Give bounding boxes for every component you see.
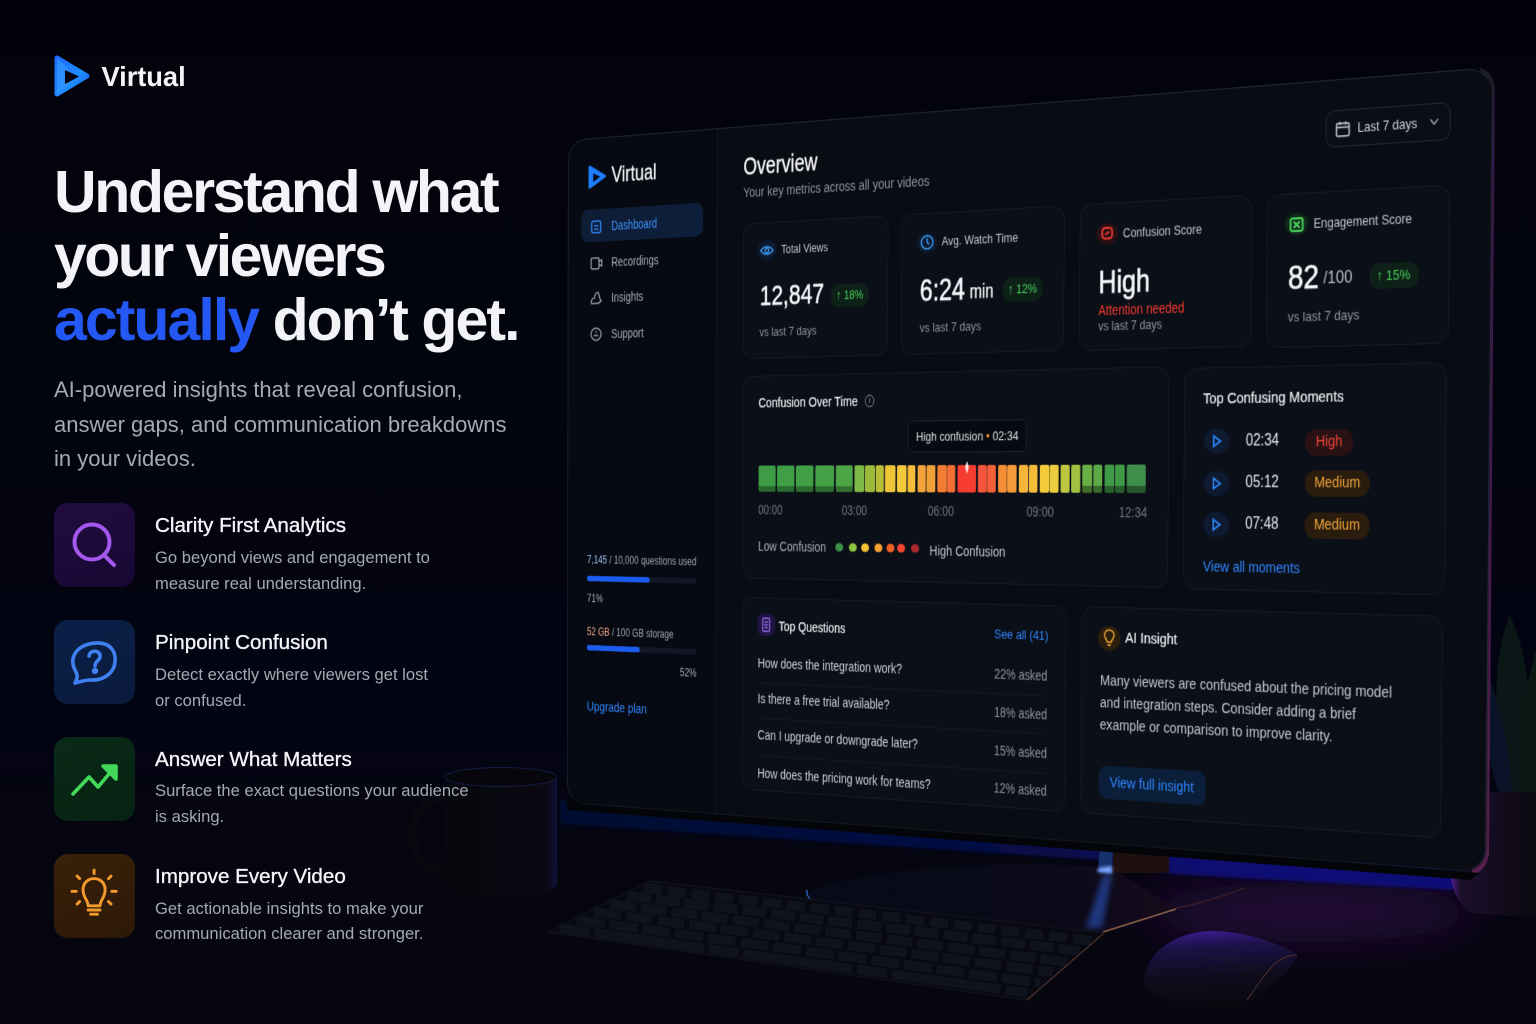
view insight button (1098, 765, 1205, 805)
description (155, 665, 428, 710)
insight text: and integration steps. Consider adding a brief (1100, 694, 1356, 724)
headline: your viewers (54, 223, 384, 289)
feature: Clarity First Analytics (54, 503, 430, 592)
icon: clock (917, 232, 937, 253)
play button (1203, 470, 1229, 496)
icon: support (590, 326, 602, 342)
icon: info (864, 394, 875, 408)
question text: How does the integration work? (758, 656, 902, 677)
storage label: 52 GB / 100 GB storage (587, 625, 674, 641)
panel: confusion score (1079, 195, 1253, 351)
brand logo (54, 56, 186, 96)
delta badge (1369, 262, 1418, 289)
description (155, 781, 469, 826)
time: 07:48 (1245, 515, 1279, 533)
unit: min (970, 280, 994, 303)
moment row 1 (1204, 428, 1354, 456)
storage bar (587, 645, 697, 655)
severity (1305, 470, 1370, 497)
icon: chevron (1430, 118, 1439, 125)
usage bar (587, 576, 697, 584)
monitor back edge (567, 68, 1495, 880)
desk glow (560, 800, 1480, 942)
delta badge (831, 283, 869, 307)
comparison: vs last 7 days (1098, 316, 1162, 334)
heading: Overview: Overview (743, 149, 818, 181)
panel: average watch time (901, 205, 1065, 355)
description: Go beyond views and engagement to (155, 548, 430, 567)
severity: High (1316, 433, 1342, 450)
headline: actually don’t get. (54, 287, 519, 353)
panel title: Top Confusing Moments (1203, 387, 1344, 407)
axis tick 06:00: 06:00 (928, 503, 954, 519)
panel: total views (743, 215, 888, 359)
question text: Is there a free trial available? (758, 692, 890, 713)
icon: engagement (1285, 213, 1309, 236)
view all link: View all moments (1203, 559, 1300, 577)
icon: recordings (590, 257, 603, 270)
alert: Attention needed (1098, 299, 1185, 318)
comparison: vs last 7 days (920, 318, 981, 335)
label: Dashboard (611, 217, 657, 234)
question 2 (758, 692, 1047, 722)
description: Detect exactly where viewers get lost (155, 665, 428, 684)
value: 6:24 (920, 272, 965, 308)
plant (1450, 615, 1536, 918)
delta badge (1003, 276, 1042, 301)
time: 02:34 (1246, 432, 1279, 450)
title: Answer What Matters (155, 748, 352, 771)
storage usage (586, 625, 697, 680)
icon: insights (590, 291, 602, 305)
comparison: vs last 7 days (759, 323, 817, 339)
value: 82 (1288, 257, 1319, 296)
description (155, 548, 430, 592)
severity (1305, 428, 1353, 455)
label: Avg. Watch Time (942, 230, 1018, 248)
severity (1304, 512, 1370, 539)
legend low label: Low Confusion (758, 539, 826, 556)
subheading: answer gaps, and communication breakdowns (54, 412, 506, 437)
subheading: AI-powered insights that reveal confusion, (54, 377, 462, 402)
icon: light bulb (54, 854, 135, 938)
mug (412, 768, 557, 900)
label: Engagement Score (1314, 210, 1412, 231)
label: Recordings (611, 253, 659, 270)
play button (1203, 511, 1229, 537)
axis tick 03:00: 03:00 (842, 503, 867, 518)
tooltip (908, 419, 1027, 453)
label: Total Views (781, 240, 828, 256)
dashboard main area (742, 102, 1451, 838)
severity: Medium (1314, 516, 1360, 534)
label: Confusion Score (1123, 221, 1202, 241)
nav: Dashboard active (581, 203, 703, 243)
feature: Answer What Matters (54, 737, 469, 826)
panel: sidebar (568, 129, 718, 812)
panel: AI insight (1080, 606, 1443, 838)
panel: confusion over time (742, 366, 1169, 588)
see all link: See all (41) (994, 626, 1048, 643)
panel: engagement score (1266, 184, 1450, 348)
icon: dashboard (590, 220, 602, 234)
value: High (1098, 262, 1150, 300)
insight text: example or comparison to improve clarity. (1100, 716, 1333, 746)
question 1 (758, 656, 1047, 684)
scale: /100 (1323, 266, 1352, 288)
chart title: Confusion Over Time (758, 394, 858, 411)
feature: Improve Every Video (54, 854, 424, 943)
title: Pinpoint Confusion (155, 631, 328, 654)
comparison: vs last 7 days (1288, 306, 1359, 324)
usage label: 7,145 / 10,000 questions used (587, 553, 697, 568)
delta badge: ↑ 12% (1008, 280, 1037, 296)
delta badge: ↑ 18% (836, 287, 863, 302)
moment row 3 (1203, 512, 1370, 540)
icon: confusion (1096, 222, 1118, 244)
panel title: Top Questions (779, 619, 845, 636)
description: communication clearer and stronger. (155, 924, 423, 943)
view insight button: View full insight (1110, 774, 1194, 797)
panel title: AI Insight (1125, 630, 1177, 649)
legend dots (835, 543, 919, 553)
subtitle: Your key metrics across all your videos (743, 172, 930, 201)
mouse (1144, 931, 1297, 1007)
value: 12,847 (760, 278, 824, 312)
nav: Support (590, 326, 644, 342)
questions usage (586, 553, 697, 605)
date picker (1326, 102, 1451, 148)
description: is asking. (155, 806, 224, 826)
subheading: in your videos. (54, 446, 196, 471)
usage percent: 71% (587, 592, 603, 605)
playhead marker (965, 461, 969, 474)
insight text: Many viewers are confused about the pricing model (1100, 672, 1392, 702)
brand name: Virtual (102, 61, 186, 92)
nav: Recordings (590, 253, 659, 270)
axis tick 09:00: 09:00 (1026, 504, 1054, 520)
legend high label: High Confusion (930, 544, 1005, 561)
share: 15% asked (994, 742, 1047, 761)
moment row 2 (1204, 470, 1370, 497)
label: Insights (611, 290, 643, 306)
share: 18% asked (994, 704, 1047, 722)
question 3 (757, 728, 1047, 761)
headline (54, 159, 519, 353)
description (155, 898, 424, 943)
question text: Can I upgrade or downgrade later? (757, 728, 918, 753)
panel: top questions (742, 597, 1067, 812)
confusion heat strip (758, 461, 1146, 554)
insight text (1100, 672, 1392, 746)
icon: play triangle logo (54, 56, 90, 96)
date label: Last 7 days (1357, 115, 1417, 135)
question text: How does the pricing work for teams? (757, 766, 931, 793)
label: Support (611, 326, 644, 342)
share: 22% asked (994, 666, 1047, 684)
icon: eye (758, 240, 776, 261)
time: 05:12 (1245, 474, 1279, 491)
monitor stand (807, 845, 1245, 932)
subheading (54, 377, 506, 471)
headline: Understand what (54, 159, 497, 225)
axis labels (758, 502, 1148, 520)
icon: bulb (1098, 626, 1121, 652)
keyboard (548, 881, 1104, 1000)
tooltip: High confusion • 02:34 (916, 428, 1018, 444)
description: Get actionable insights to make your (155, 898, 423, 918)
title: Improve Every Video (155, 865, 346, 888)
icon: question bubble (54, 620, 135, 704)
delta badge: ↑ 15% (1377, 266, 1411, 284)
question 4 (757, 766, 1047, 799)
monitor screen dashboard (567, 67, 1493, 873)
sidebar logo icon (588, 165, 606, 190)
icon: magnifier (54, 503, 135, 587)
feature: Pinpoint Confusion (54, 620, 428, 710)
sidebar brand: Virtual (611, 160, 657, 187)
axis tick 00:00: 00:00 (758, 502, 783, 517)
description: measure real understanding. (155, 574, 366, 592)
nav: Insights (590, 290, 644, 306)
icon: calendar (1335, 120, 1350, 138)
icon: document (757, 613, 775, 636)
icon: trending arrow (54, 737, 135, 821)
axis tick 12:34: 12:34 (1119, 504, 1147, 520)
upgrade link: Upgrade plan (587, 699, 647, 717)
panel: top confusing moments (1183, 362, 1447, 595)
description: or confused. (155, 690, 246, 710)
share: 12% asked (994, 780, 1047, 799)
description: Surface the exact questions your audience (155, 781, 469, 800)
storage percent: 52% (680, 666, 697, 680)
play button (1203, 428, 1229, 454)
severity: Medium (1314, 475, 1360, 492)
title: Clarity First Analytics (155, 514, 346, 537)
